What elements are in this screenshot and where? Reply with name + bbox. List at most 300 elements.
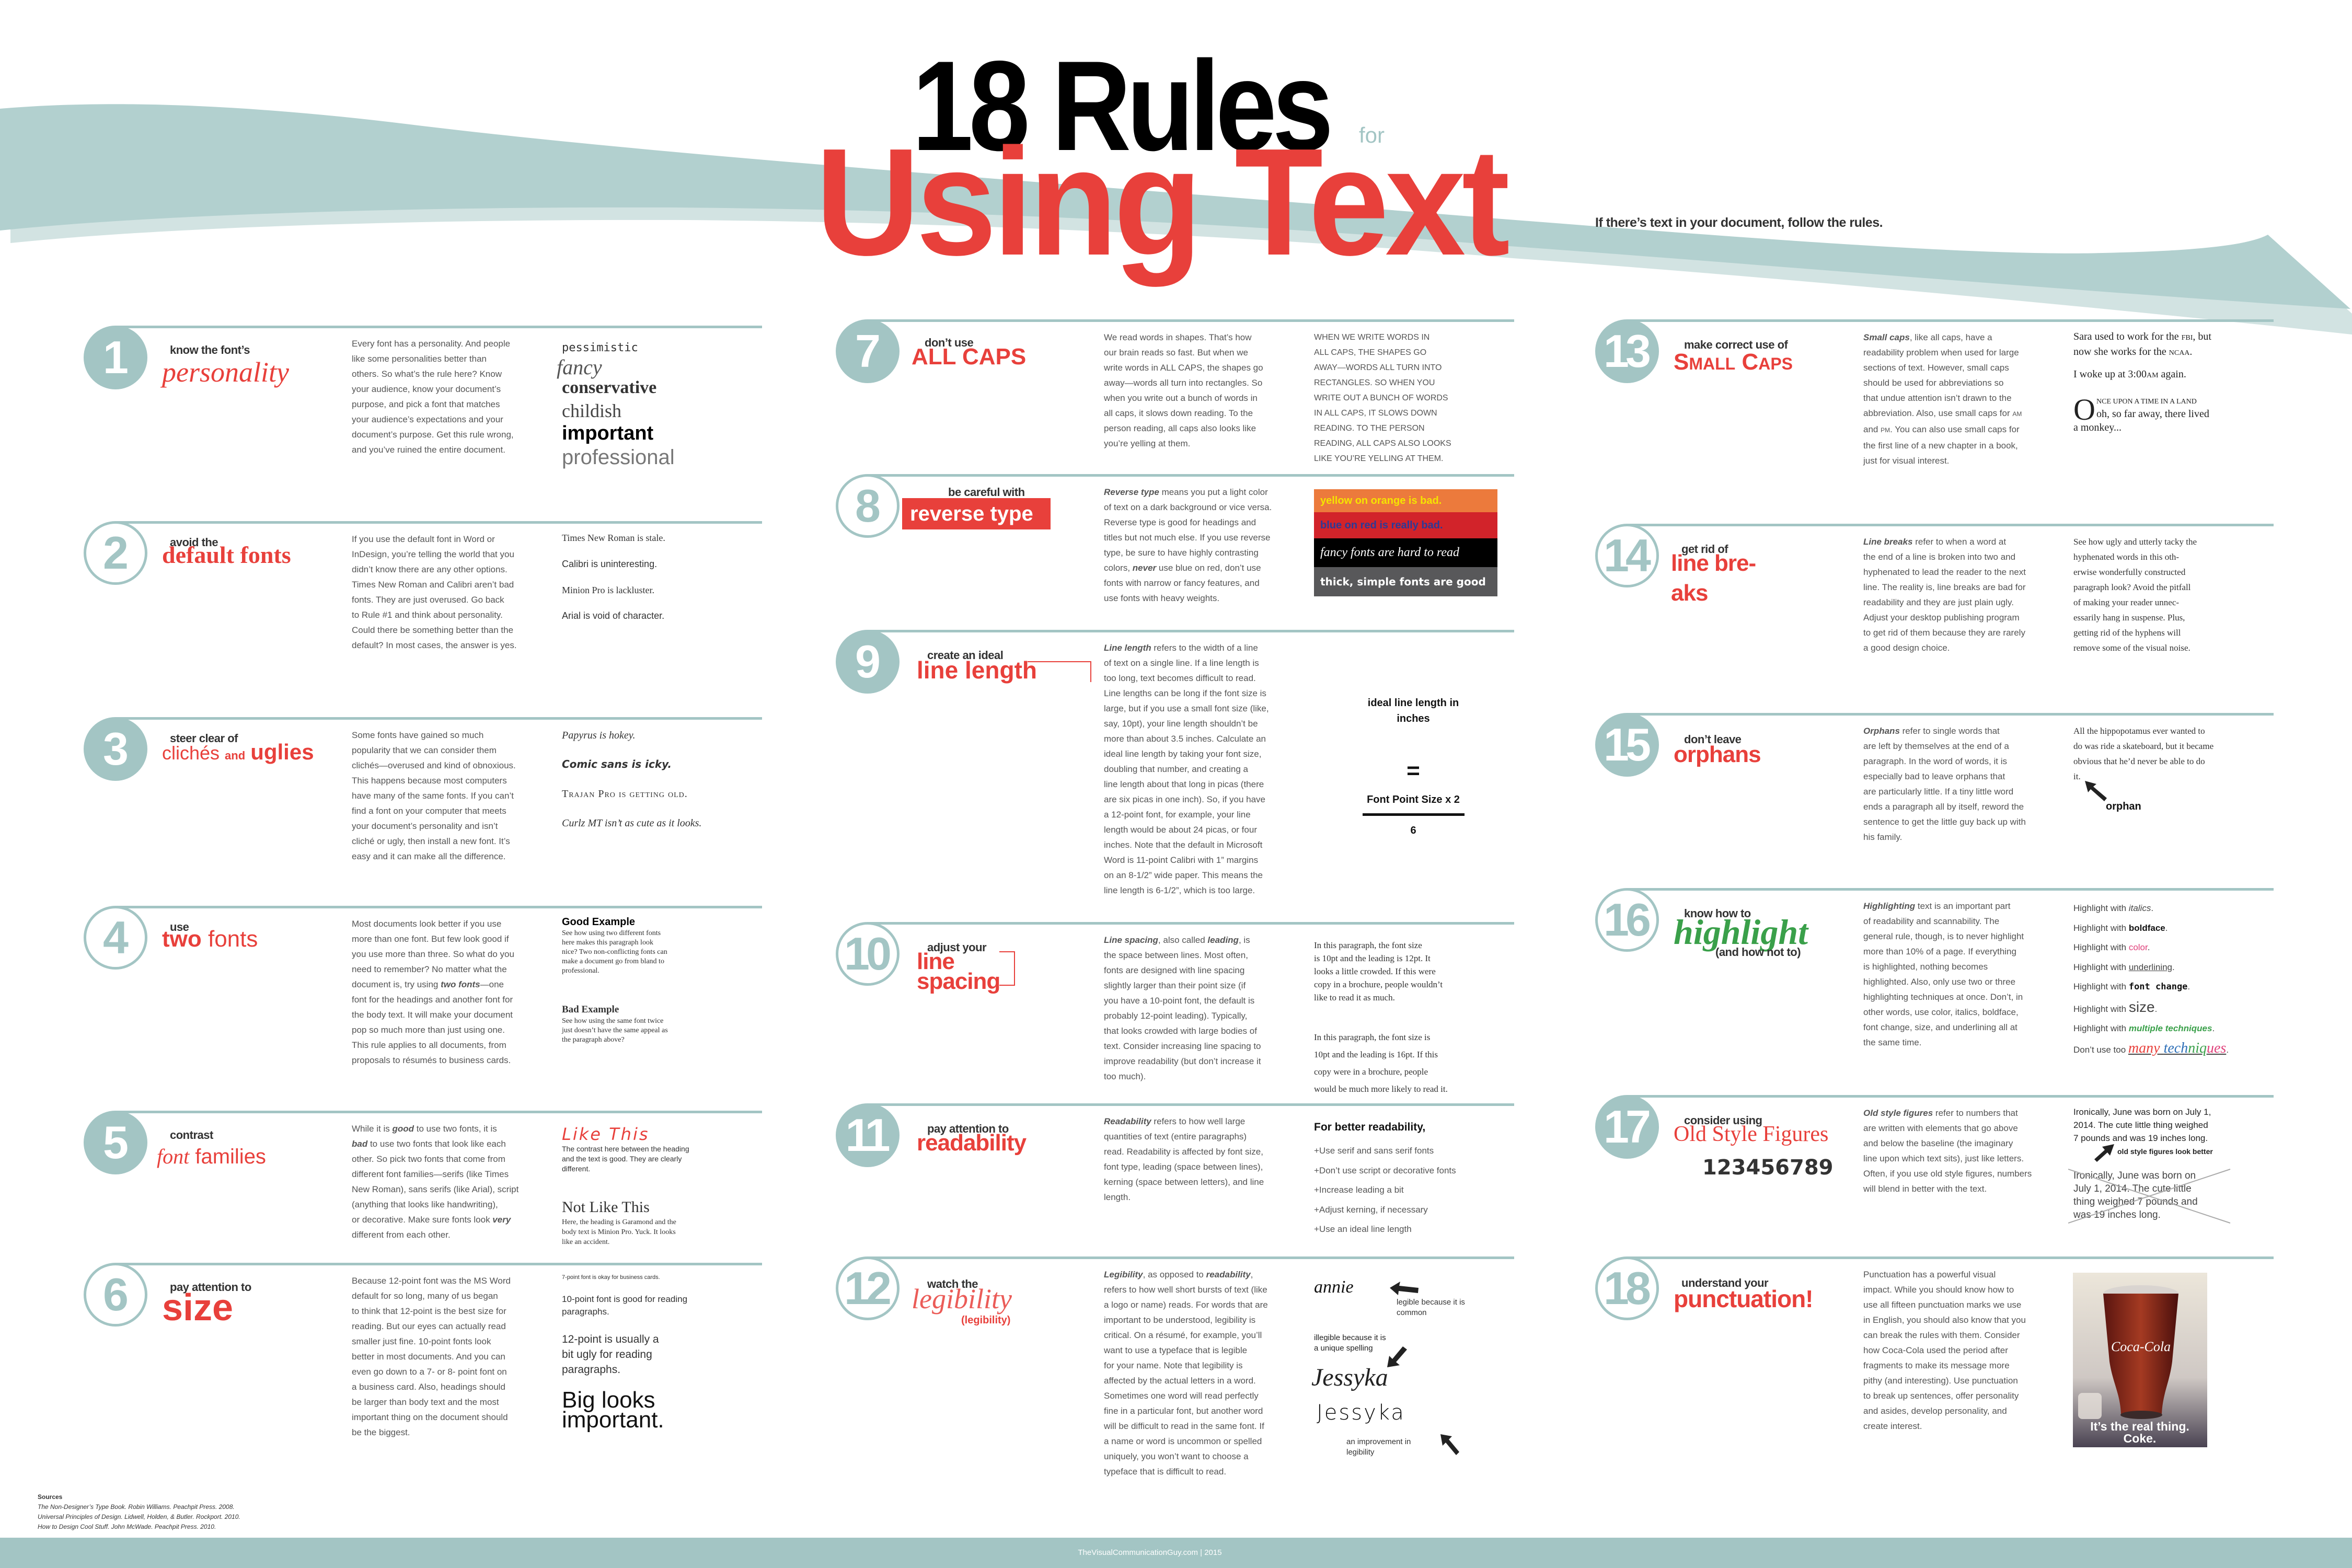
heading 8: reverse type xyxy=(910,502,1033,525)
body 1: purpose, and pick a font that matches xyxy=(352,399,500,409)
sources: How to Design Cool Stuff. John McWade. Peachpit Press. 2010. xyxy=(38,1523,216,1530)
body 16: is highlighted, nothing becomes xyxy=(1863,962,1988,972)
circle 9: 9 xyxy=(855,636,877,687)
body 10: that looks crowded with large bodies of xyxy=(1104,1026,1257,1036)
heading 11: readability xyxy=(917,1130,1026,1156)
heading 12 xyxy=(914,1271,1102,1334)
body 18: in English, you should also know that you xyxy=(1863,1315,2026,1325)
body 13: abbreviation. Also, use small caps for AM xyxy=(1863,408,2022,418)
rule 5 xyxy=(84,1111,762,1246)
body 2: Times New Roman and Calibri aren’t bad xyxy=(352,580,514,590)
body 5 xyxy=(352,1124,518,1240)
heading 17 xyxy=(1674,1110,1862,1172)
examples 10: In this paragraph, the font size is xyxy=(1314,1032,1430,1042)
rule 4 xyxy=(84,906,762,1065)
examples 1: conservative xyxy=(562,378,656,397)
examples 16: Highlight with color. xyxy=(2073,942,2150,952)
examples 14: paragraph look? Avoid the pitfall xyxy=(2073,582,2190,592)
examples 10: 10pt and the leading is 16pt. If this xyxy=(1314,1050,1438,1059)
arrow: improvement xyxy=(1439,1433,1460,1457)
circle 15 xyxy=(1595,713,1659,777)
body 3: This happens because most computers xyxy=(352,776,507,786)
body 8: Reverse type is good for headings and xyxy=(1104,517,1256,527)
circle 17: 17 xyxy=(1604,1101,1647,1152)
body 12: will be difficult to read in the same font. If xyxy=(1104,1421,1264,1431)
body 5: bad to use two fonts that look like each xyxy=(352,1139,506,1149)
examples 14: hyphenated words in this oth- xyxy=(2073,552,2179,562)
examples 5: Like This xyxy=(562,1124,649,1144)
body 13: Small caps, like all caps, have a xyxy=(1863,332,1992,342)
arrow: old style xyxy=(2094,1144,2115,1163)
rule 18 xyxy=(1595,1256,2275,1413)
body 6: even go down to a 7- or 8- point font on xyxy=(352,1367,507,1377)
body 7: you’re yelling at them. xyxy=(1104,439,1190,448)
examples 1: pessimistic xyxy=(562,341,638,354)
title: for xyxy=(1359,123,1385,147)
body 13: and PM. You can also use small caps for xyxy=(1863,424,2020,434)
rule 3 xyxy=(84,717,762,861)
body 6: smaller just fine. 10-point fonts look xyxy=(352,1336,491,1346)
examples 8: colour blocks: thick, simple fonts are good xyxy=(1320,575,1486,588)
body 18: pithy (and interesting). Use punctuation xyxy=(1863,1376,2018,1386)
body 8: fonts with narrow or fancy features, and xyxy=(1104,578,1260,588)
heading 2: default fonts xyxy=(162,541,291,568)
body 2: fonts. They are just overused. Go back xyxy=(352,595,504,605)
body 2: didn’t know there are any other options. xyxy=(352,564,508,574)
circle 18: 18 xyxy=(1604,1262,1647,1314)
rule 16 xyxy=(1595,888,2275,1045)
body 12: affected by the actual letters in a word. xyxy=(1104,1376,1256,1386)
examples 4: Bad Example xyxy=(562,1004,619,1015)
examples 6: paragraphs. xyxy=(562,1364,620,1376)
examples 17 xyxy=(2073,1105,2275,1241)
examples 12: legibility samples: annie xyxy=(1314,1277,1354,1297)
body 16: general rule, though, is to never highlight xyxy=(1863,931,2024,941)
body 15: paragraph. In the word of words, it is xyxy=(1863,756,2007,766)
heading 10: line xyxy=(917,949,954,974)
body 13: sections of text. However, small caps xyxy=(1863,363,2009,373)
circle 13 xyxy=(1595,319,1659,383)
circle 5 xyxy=(84,1111,147,1174)
body 15: are left by themselves at the end of a xyxy=(1863,741,2009,751)
heading 15: don’t leave xyxy=(1684,733,1741,746)
formula: Font Point Size x 2 xyxy=(1367,794,1460,805)
examples 6: 12-point is usually a xyxy=(562,1333,659,1345)
examples 8: colour blocks: yellow on orange is bad. xyxy=(1320,495,1442,506)
examples 12: legibility samples: a unique spelling xyxy=(1314,1344,1373,1353)
rule 17 xyxy=(1595,1095,2275,1252)
body 5: or decorative. Make sure fonts look very xyxy=(352,1215,511,1225)
formula: ideal line length in xyxy=(1368,697,1459,709)
examples 16: Highlight with italics. xyxy=(2073,903,2153,913)
body 1: like some personalities better than xyxy=(352,354,487,364)
body 8 xyxy=(1104,485,1272,606)
body 15: sentence to get the little guy back up with xyxy=(1863,817,2026,827)
body 4: pop so much more than just using one. xyxy=(352,1025,505,1035)
heading 15: orphans xyxy=(1674,742,1761,767)
examples 6: paragraphs. xyxy=(562,1307,609,1317)
body 15: especially bad to leave orphans that xyxy=(1863,771,2005,781)
body 8: titles but not much else. If you use reverse xyxy=(1104,533,1270,543)
body 1: document’s purpose. Get this rule wrong, xyxy=(352,430,514,440)
circle 14: 14 xyxy=(1604,529,1647,581)
body 2: to Rule #1 and think about personality. xyxy=(352,610,503,620)
body 18: use all fifteen punctuation marks we use xyxy=(1863,1300,2021,1310)
circle 6: 6 xyxy=(103,1269,125,1320)
examples 4: nice? Two non-conflicting fonts can xyxy=(562,948,667,956)
examples 15: do was ride a skateboard, but it became xyxy=(2073,741,2213,751)
body 3: have many of the same fonts. If you can’t xyxy=(352,791,514,801)
body 6: to think that 12-point is the best size for xyxy=(352,1306,506,1316)
body 15: are particularly little. If a tiny little word xyxy=(1863,787,2013,797)
body 16: the same time. xyxy=(1863,1037,1921,1047)
examples 7 xyxy=(1314,330,1515,471)
body 7: write words in ALL CAPS, the shapes go xyxy=(1104,363,1263,373)
body 14: a good design choice. xyxy=(1863,643,1950,653)
heading 5: contrast xyxy=(170,1128,213,1142)
body 3: your document’s personality and isn’t xyxy=(352,821,498,831)
examples 4: the paragraph above? xyxy=(562,1036,625,1044)
circle 4 xyxy=(84,906,147,970)
body 11: Readability refers to how well large xyxy=(1104,1116,1245,1126)
body 9: more than about 3.5 inches. Calculate an xyxy=(1104,734,1266,744)
examples 5: like an accident. xyxy=(562,1238,609,1246)
heading 13 xyxy=(1674,334,1862,397)
heading 6 xyxy=(162,1281,251,1329)
circle 11 xyxy=(836,1103,900,1167)
body 9: a 12-point font, for example, your line xyxy=(1104,810,1251,820)
circle 6 xyxy=(84,1263,147,1327)
circle 18 xyxy=(1595,1256,1659,1320)
body 16: font change, size, and underlining all at xyxy=(1863,1022,2017,1032)
examples 7: LIKE YOU’RE YELLING AT THEM. xyxy=(1314,454,1444,463)
body 18 xyxy=(1863,1267,2026,1434)
body 9: ideal line length by taking your font size, xyxy=(1104,749,1261,759)
body 10: you have a 10-point font, the default is xyxy=(1104,996,1254,1006)
examples 17: July 1, 2014. The cute little xyxy=(2073,1183,2192,1194)
body 9: inches. Note that the default in Microsoft xyxy=(1104,840,1262,850)
body 10: text. Consider increasing line spacing to xyxy=(1104,1041,1261,1051)
body 7: when you write out a bunch of words in xyxy=(1104,393,1258,403)
body 2: If you use the default font in Word or xyxy=(352,534,495,544)
examples 4: just doesn’t have the same appeal as xyxy=(562,1027,668,1034)
examples 7: ALL CAPS, THE SHAPES GO xyxy=(1314,348,1426,357)
sources: The Non-Designer’s Type Book. Robin Williams. Peachpit Press. 2008. xyxy=(38,1503,235,1511)
body 12: a name or word is uncommon or spelled xyxy=(1104,1436,1262,1446)
examples 3: Curlz MT isn’t as cute as it looks. xyxy=(562,817,701,829)
body 9: Line lengths can be long if the font size is xyxy=(1104,688,1266,698)
heading 8: be careful with xyxy=(948,486,1025,499)
examples 16: Highlight with underlining. xyxy=(2073,962,2175,972)
heading 1: know the font’s xyxy=(170,343,250,356)
body 16 xyxy=(1863,898,2024,1050)
examples 1 xyxy=(557,341,675,469)
rule 2 xyxy=(84,521,762,650)
body 7: We read words in shapes. That’s how xyxy=(1104,332,1252,342)
examples 15: obvious that he’d never be able to do xyxy=(2073,756,2205,766)
examples 6: Big looks xyxy=(562,1387,655,1413)
title: 18 Rules xyxy=(912,34,1329,177)
examples 1: professional xyxy=(562,446,675,469)
body 16: of readability and scannability. The xyxy=(1863,916,1999,926)
circle 16 xyxy=(1595,888,1659,952)
examples 10: like to read it as much. xyxy=(1314,993,1395,1002)
body 9: large, but if you use a small font size (like, xyxy=(1104,704,1269,713)
body 1: your audience’s expectations and your xyxy=(352,414,503,424)
body 10: improve readability (but don’t increase it xyxy=(1104,1056,1261,1066)
rule 9 xyxy=(836,630,1515,787)
examples 7: AWAY—WORDS ALL TURN INTO xyxy=(1314,363,1442,372)
body 5: While it is good to use two fonts, it is xyxy=(352,1124,497,1134)
rule 14 xyxy=(1595,524,2275,681)
examples 5 xyxy=(562,1124,689,1246)
examples 17: 2014. The cute little thing weighed xyxy=(2073,1120,2208,1130)
examples 17: old style figures look better xyxy=(2117,1147,2213,1156)
heading 3: clichés and uglies xyxy=(162,740,314,764)
heading 5: font families xyxy=(157,1145,266,1168)
rule 15 xyxy=(1595,713,2275,870)
examples 15: orphan xyxy=(2106,801,2141,812)
examples 10: would be much more likely to read it. xyxy=(1314,1084,1448,1094)
body 11: kerning (space between letters), and line xyxy=(1104,1177,1264,1187)
examples 17: Ironically, June was born on xyxy=(2073,1170,2196,1181)
examples 11: +Increase leading a bit xyxy=(1314,1185,1404,1195)
examples 3 xyxy=(561,730,701,829)
body 9: of text on a single line. If a line length is xyxy=(1104,658,1259,668)
body 7: all caps, it slows down reading. To the xyxy=(1104,408,1253,418)
heading 18: understand your xyxy=(1681,1276,1768,1289)
examples 14 xyxy=(2073,534,2275,670)
heading 10: spacing xyxy=(917,969,1000,994)
examples 4: Good Example xyxy=(562,916,635,928)
examples 16: Highlight with multiple techniques. xyxy=(2073,1023,2215,1033)
heading 15 xyxy=(1674,728,1862,790)
body 17: are written with elements that go above xyxy=(1863,1123,2018,1133)
body 6: default for so long, many of us began xyxy=(352,1291,498,1301)
body 18: to break up sentences, offer personality xyxy=(1863,1391,2019,1401)
examples 7: RECTANGLES. SO WHEN YOU xyxy=(1314,378,1435,387)
body 4: you use more than three. So what do you xyxy=(352,949,514,959)
body 13: that undue attention isn’t drawn to the xyxy=(1863,393,2012,403)
heading 17: 123456789 xyxy=(1702,1156,1834,1180)
body 3: Some fonts have gained so much xyxy=(352,730,483,740)
body 12: typeface that is difficult to read. xyxy=(1104,1467,1226,1477)
body 4: font for the headings and another font for xyxy=(352,995,513,1005)
body 9: on an 8-1/2” wide paper. This means the xyxy=(1104,870,1263,880)
body 3: cliché or ugly, then install a new font. It’s xyxy=(352,836,510,846)
heading 14: line bre- xyxy=(1671,550,1756,576)
body 18: can break the rules with them. Consider xyxy=(1863,1330,2020,1340)
body 10: Line spacing, also called leading, is xyxy=(1104,935,1250,945)
body 1 xyxy=(352,339,514,455)
examples 12: legibility samples: Jessyka xyxy=(1311,1364,1388,1391)
coke ad image: Coca-Cola xyxy=(2111,1339,2171,1354)
circle 15: 15 xyxy=(1604,719,1647,770)
body 16: more than 10% of a page. If everything xyxy=(1863,947,2016,956)
heading 18: punctuation! xyxy=(1674,1285,1813,1312)
arrow: orphan xyxy=(2085,781,2108,802)
body 12: refers to how well short bursts of text (like xyxy=(1104,1285,1267,1295)
body 9: say, 10pt), your line length shouldn’t be xyxy=(1104,719,1258,729)
examples 14: See how ugly and utterly tacky the xyxy=(2073,537,2197,547)
body 9: Line length refers to the width of a line xyxy=(1104,643,1258,653)
body 16: highlighting techniques at once. Don’t, in xyxy=(1863,992,2023,1002)
body 14: the end of a line is broken into two and xyxy=(1863,552,2015,562)
background wave xyxy=(0,104,2352,335)
body 9 xyxy=(1104,640,1269,898)
body 10 xyxy=(1104,932,1261,1084)
body 5: New Roman), sans serifs (like Arial), script xyxy=(352,1184,518,1194)
body 15: his family. xyxy=(1863,832,1902,842)
examples 14: of making your reader unnec- xyxy=(2073,597,2179,607)
examples 17: was 19 inches long. xyxy=(2073,1209,2161,1220)
body 6: be larger than body text and the most xyxy=(352,1397,499,1407)
circle 17 xyxy=(1595,1095,1659,1159)
rule 12 xyxy=(836,1256,1515,1413)
heading 10: adjust your xyxy=(927,941,986,954)
body 3 xyxy=(352,730,516,861)
body 14 xyxy=(1863,534,2026,655)
heading 14 xyxy=(1674,538,1862,601)
circle 11: 11 xyxy=(845,1109,887,1161)
body 18: impact. While you should know how to xyxy=(1863,1285,2014,1295)
heading 6: pay attention to xyxy=(170,1281,251,1294)
examples 2: Minion Pro is lackluster. xyxy=(562,585,654,595)
examples 11 xyxy=(1314,1114,1515,1250)
body 10: fonts are designed with line spacing xyxy=(1104,965,1244,975)
circle 5: 5 xyxy=(103,1116,125,1168)
body 5: different from each other. xyxy=(352,1230,451,1240)
body 4: This rule applies to all documents, from xyxy=(352,1040,506,1050)
body 17: line upon which text sits), just like letters. xyxy=(1863,1154,2024,1163)
title: Using Text xyxy=(815,117,1506,287)
body 18: create interest. xyxy=(1863,1421,1922,1431)
body 14: hyphenated to lead the reader to the next xyxy=(1863,567,2026,577)
body 12: fine in a particular font, but another word xyxy=(1104,1406,1263,1416)
body 8: type, be sure to have highly contrasting xyxy=(1104,548,1259,558)
body 5: (anything that looks like handwriting), xyxy=(352,1200,498,1209)
circle 16: 16 xyxy=(1604,894,1647,946)
heading 9: line length xyxy=(917,656,1037,684)
examples 10: is 10pt and the leading is 12pt. It xyxy=(1314,953,1431,963)
body 11: read. Readability is affected by font size, xyxy=(1104,1147,1263,1157)
body 9: are six picas in one inch). So, if you have xyxy=(1104,794,1265,804)
examples 13: now she works for the NCAA. xyxy=(2073,346,2192,358)
body 10: slightly larger than their point size (if xyxy=(1104,981,1246,990)
heading 10 xyxy=(914,937,1102,999)
examples 1: fancy xyxy=(557,355,602,379)
heading 12: watch the xyxy=(927,1277,978,1290)
circle 9 xyxy=(836,630,900,694)
examples 5: and the text is good. They are clearly xyxy=(562,1155,682,1163)
body 5: different font families—serifs (like Times xyxy=(352,1169,509,1179)
body 13: should be used for abbreviations so xyxy=(1863,378,2003,388)
examples 13: Sara used to work for the FBI, but xyxy=(2073,331,2211,342)
examples 13: I woke up at 3:00AM again. xyxy=(2073,368,2186,380)
examples 3: Trajan Pro is getting old. xyxy=(562,788,688,800)
examples 11: +Use an ideal line length xyxy=(1314,1224,1412,1234)
body 12: a logo or name) reads. For words that are xyxy=(1104,1300,1268,1310)
examples 12: legibility samples: illegible because it is xyxy=(1314,1333,1386,1342)
body 9: line length is 6-1/2”, which is too large. xyxy=(1104,885,1255,895)
body 3: easy and it can make all the difference. xyxy=(352,851,506,861)
examples 2 xyxy=(562,533,665,621)
formula: inches xyxy=(1397,713,1430,724)
examples 16: Highlight with size. xyxy=(2073,998,2157,1015)
examples 4 xyxy=(561,916,668,1044)
body 18: fragments to make its message more xyxy=(1863,1361,2010,1370)
arrow: jessyka xyxy=(1386,1345,1407,1369)
examples 7: READING, ALL CAPS ALSO LOOKS xyxy=(1314,439,1451,448)
heading 16: know how to xyxy=(1684,907,1751,920)
coke ad image xyxy=(2073,1273,2207,1447)
sources: Sources xyxy=(38,1493,62,1501)
rule 7 xyxy=(836,319,1515,476)
body 4: proposals to résumés to business cards. xyxy=(352,1055,511,1065)
circle 7: 7 xyxy=(855,325,877,377)
examples 4: professional. xyxy=(562,967,599,975)
examples 11: +Use serif and sans serif fonts xyxy=(1314,1146,1434,1156)
body 4: need to remember? No matter what the xyxy=(352,964,507,974)
body 12: Legibility, as opposed to readability, xyxy=(1104,1270,1253,1279)
formula xyxy=(1356,695,1471,847)
examples 4: here makes this paragraph look xyxy=(562,939,653,947)
circle 10: 10 xyxy=(844,928,888,979)
examples 7: WHEN WE WRITE WORDS IN xyxy=(1314,333,1429,342)
body 8: use fonts with heavy weights. xyxy=(1104,593,1219,603)
circle 3: 3 xyxy=(103,723,125,775)
examples 10: In this paragraph, the font size xyxy=(1314,940,1422,950)
body 12: want to use a typeface that is legible xyxy=(1104,1345,1247,1355)
coke ad image: Coke. xyxy=(2124,1432,2156,1445)
heading 14: get rid of xyxy=(1681,543,1728,556)
examples 1: childish xyxy=(562,400,621,421)
heading 17: consider using xyxy=(1684,1114,1762,1127)
rule 8 xyxy=(836,474,1515,631)
heading 9: create an ideal xyxy=(927,649,1003,662)
examples 14: getting rid of the hyphens will xyxy=(2073,628,2181,638)
examples 13: O xyxy=(2073,393,2095,426)
examples 11: For better readability, xyxy=(1314,1121,1425,1133)
circle 3 xyxy=(84,717,147,781)
rule 11 xyxy=(836,1103,1515,1260)
heading 12: (legibility) xyxy=(961,1315,1010,1326)
body 13: just for visual interest. xyxy=(1863,456,1949,466)
examples 12: legibility samples xyxy=(1314,1267,1515,1476)
examples 6: bit ugly for reading xyxy=(562,1348,652,1361)
examples 7: IN ALL CAPS, IT SLOWS DOWN xyxy=(1314,409,1437,418)
heading 7: ALL CAPS xyxy=(912,344,1026,370)
body 3: popularity that we can consider them xyxy=(352,745,497,755)
body 1: and you’ve ruined the entire document. xyxy=(352,445,505,455)
heading 4: use xyxy=(170,920,189,933)
examples 17: thing weighed 7 pounds and xyxy=(2073,1196,2198,1207)
body 18: Punctuation has a powerful visual xyxy=(1863,1270,1996,1279)
heading 12: legibility xyxy=(912,1283,1012,1315)
body 8: Reverse type means you put a light color xyxy=(1104,487,1268,497)
footer bar: TheVisualCommunicationGuy.com | 2015 xyxy=(1078,1548,1222,1557)
examples 7: WRITE OUT A BUNCH OF WORDS xyxy=(1314,394,1448,402)
text: Don’t use too many techniques. xyxy=(2073,1040,2229,1056)
heading 16 xyxy=(1674,903,1862,965)
examples 6: important. xyxy=(562,1407,664,1433)
body 4: document is, try using two fonts—one xyxy=(352,979,504,989)
examples 5: body text is Minion Pro. Yuck. It looks xyxy=(562,1228,676,1236)
body 14: line. The reality is, line breaks are bad for xyxy=(1863,582,2026,592)
heading 7: don’t use xyxy=(925,336,973,349)
body 12: critical. On a résumé, for example, you’ll xyxy=(1104,1330,1262,1340)
body 13 xyxy=(1863,330,2022,468)
